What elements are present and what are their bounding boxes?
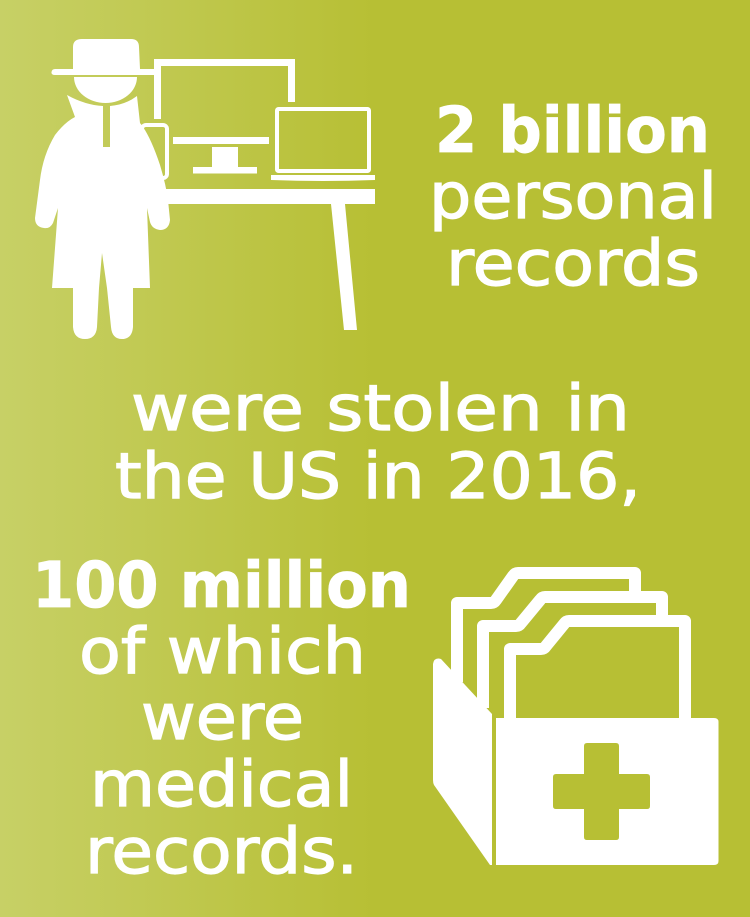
text block: were stolen in the US in 2016 [115, 372, 641, 513]
icon: folder tabs [457, 573, 685, 720]
icon: spy at desk with computers [35, 39, 375, 339]
icon: monitor [154, 59, 295, 174]
text block: 100 million of which were medical records [32, 549, 411, 888]
text block: 100 million of which were medical records: of which [79, 615, 366, 688]
icon: folder front with cross [496, 718, 718, 865]
icon: laptop [271, 109, 375, 181]
icon: spy figure [35, 39, 170, 339]
text block: 100 million of which were medical records: medical [90, 748, 353, 821]
icon: phone [142, 125, 167, 178]
icon: desk [160, 189, 375, 330]
heading: 2 billion personal records: records [446, 227, 700, 300]
text block: 100 million of which were medical records: were [141, 681, 304, 754]
heading: 2 billion personal records: personal [429, 160, 717, 233]
text block: were stolen in the US in 2016: the US in 2016, [115, 440, 641, 513]
text block: 100 million of which were medical records: 100 million [32, 549, 411, 622]
heading: 2 billion personal records: 2 billion [435, 94, 710, 167]
icon: medical records folder [433, 573, 718, 865]
text block: 100 million of which were medical records: records. [85, 815, 358, 888]
text block: were stolen in the US in 2016: were stolen in [131, 372, 630, 445]
heading: 2 billion personal records [429, 94, 717, 300]
icon: folder side flap [433, 659, 492, 865]
